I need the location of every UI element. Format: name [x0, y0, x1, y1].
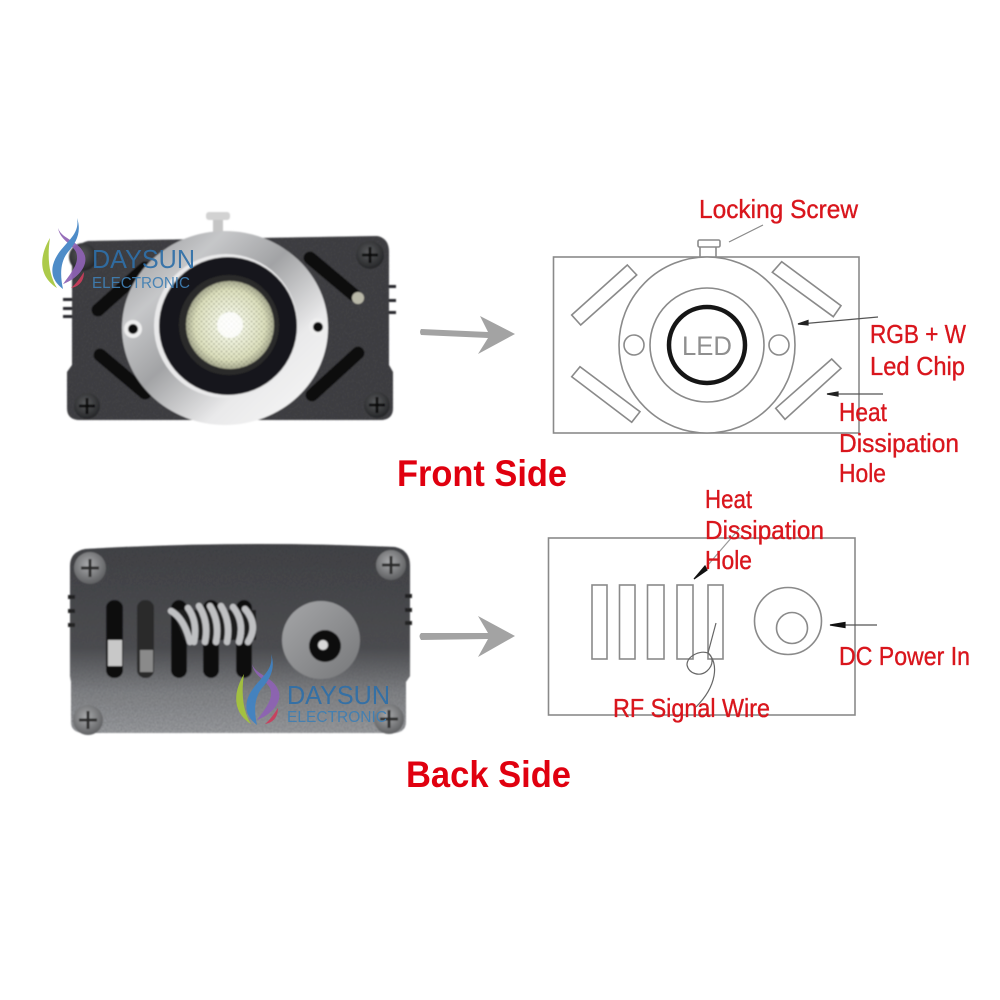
labels back: Heat: [705, 484, 753, 514]
side fins back: [68, 594, 412, 627]
pointer lines back: [694, 528, 877, 628]
locking screw photo: [206, 212, 230, 233]
RF wire: [687, 623, 716, 707]
device body back: [70, 544, 410, 733]
logo: front watermark: ELECTRONIC: [92, 275, 190, 292]
vent slots front: [98, 258, 358, 395]
LED lens: [179, 275, 279, 375]
photo: front side of device: [63, 212, 396, 425]
heading: front side: Front Side: [397, 453, 567, 494]
diagram: back side: [548, 538, 855, 715]
logo text back: DAYSUN: [287, 680, 390, 710]
device body front: [67, 236, 393, 420]
corner screws back: [73, 550, 406, 735]
logo text: DAYSUN: [92, 244, 195, 274]
logo: back watermark: ELECTRONIC: [287, 709, 387, 726]
logo flame: [42, 218, 85, 289]
arrow: back: [420, 616, 515, 657]
outer ring: [619, 257, 795, 433]
labels back: Hole: [705, 545, 752, 575]
LED ring: LED: [682, 331, 732, 361]
labels back: Dissipation: [705, 515, 824, 545]
labels front: Heat: [839, 397, 888, 427]
labels front: Dissipation: [839, 428, 959, 458]
mounting holes: [124, 318, 327, 338]
logo: back watermark: [236, 654, 390, 726]
power circle: [754, 588, 822, 654]
labels back: DC Power In: [839, 641, 970, 671]
antenna coil: [171, 606, 256, 642]
labels front: RGB + W: [870, 319, 966, 349]
DC power jack: [282, 601, 360, 679]
labels back: [613, 484, 970, 723]
screw head: [698, 240, 720, 257]
corner screws front: [69, 241, 390, 419]
labels front: Hole: [839, 458, 886, 488]
heat holes: [572, 262, 841, 422]
diagram: front side: [554, 240, 859, 433]
pointer lines front: [729, 225, 883, 396]
silver ring: [122, 231, 328, 425]
back slots: [592, 585, 723, 659]
logo flame back: [236, 654, 279, 725]
labels front: [699, 194, 966, 488]
labels back: RF Signal Wire: [613, 693, 770, 723]
side fins: [63, 285, 396, 318]
vent slots back: [106, 600, 252, 678]
labels front: Locking Screw: [699, 194, 858, 224]
logo: front watermark: [42, 218, 195, 292]
heading: back side: Back Side: [406, 754, 571, 795]
LED ring: [669, 307, 745, 383]
photo: back side of device: [68, 544, 412, 735]
arrow: front: [420, 316, 515, 354]
labels front: Led Chip: [870, 351, 965, 381]
